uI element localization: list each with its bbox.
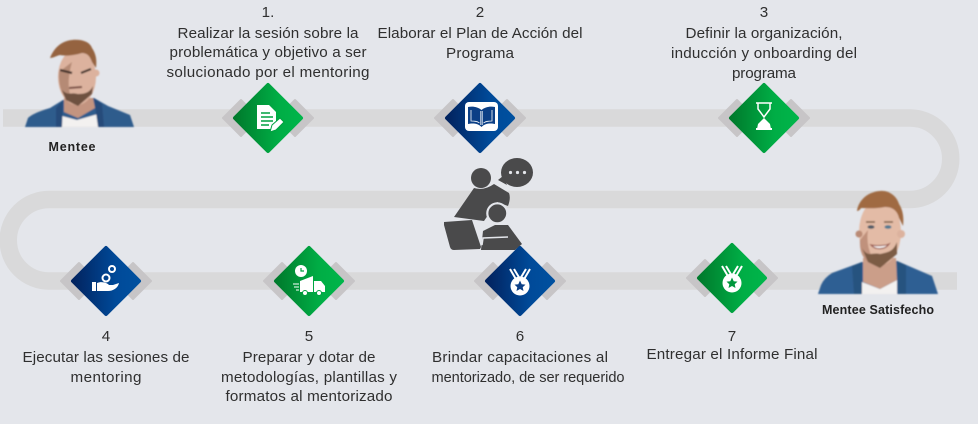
step 5 text: formatos al mentorizado xyxy=(226,388,392,405)
step 2 text: Programa xyxy=(446,45,515,62)
step 6 text: mentorizado, de ser requerido xyxy=(432,370,624,386)
label: Mentee Satisfecho: Mentee Satisfecho xyxy=(822,303,934,317)
step 6 diamond xyxy=(475,248,565,314)
portrait: Mentee xyxy=(25,40,134,127)
step 6 text: 6 xyxy=(516,328,524,345)
step 7 text: 7 xyxy=(728,328,736,345)
central mentoring icon xyxy=(444,158,533,250)
step 1 text: 1. xyxy=(262,4,274,21)
step 7 text: Entregar el Informe Final xyxy=(646,346,818,363)
icon: hand with coins xyxy=(92,266,119,291)
label: Mentee: Mentee xyxy=(48,140,96,154)
step 1 text: Realizar la sesión sobre la xyxy=(178,25,359,42)
step 6 text xyxy=(432,328,624,386)
step 5 text xyxy=(221,328,397,405)
icon: medal xyxy=(510,269,530,296)
step 3 text xyxy=(671,4,857,82)
icon: document and pencil xyxy=(257,105,284,132)
step 3 text: 3 xyxy=(760,4,768,21)
portrait: Mentee Satisfecho xyxy=(818,191,938,294)
step 2 text: 2 xyxy=(476,4,484,21)
icon: clock and delivery truck xyxy=(293,265,325,296)
step 1 text xyxy=(166,4,370,81)
step 4 text: Ejecutar las sesiones de xyxy=(22,349,190,366)
icon: open book xyxy=(465,102,498,131)
icon: medal xyxy=(722,266,742,292)
step 4 text: 4 xyxy=(102,328,110,345)
step 6 text: Brindar capacitaciones al xyxy=(432,349,608,366)
step 1 text: solucionado por el mentoring xyxy=(166,64,370,81)
step 4 text: mentoring xyxy=(70,369,142,386)
step 1 diamond xyxy=(223,85,313,151)
icon: hourglass xyxy=(756,103,772,129)
step 5 text: 5 xyxy=(305,328,313,345)
step 5 text: metodologías, plantillas y xyxy=(221,369,397,386)
step 4 text xyxy=(22,328,190,386)
step 2 diamond xyxy=(435,85,525,151)
step 7 text xyxy=(646,328,818,363)
step 3 text: Definir la organización, xyxy=(686,25,842,42)
serpentine path xyxy=(3,118,957,281)
step 4 diamond xyxy=(61,248,151,314)
step 3 text: programa xyxy=(732,65,797,82)
step 5 text: Preparar y dotar de xyxy=(242,349,376,366)
step 7 diamond xyxy=(687,245,777,311)
step 1 text: problemática y objetivo a ser xyxy=(170,44,366,61)
step 3 diamond xyxy=(719,85,809,151)
step 2 text xyxy=(378,4,582,62)
step 3 text: inducción y onboarding del xyxy=(671,45,857,62)
step 2 text: Elaborar el Plan de Acción del xyxy=(378,25,582,42)
step 5 diamond xyxy=(264,248,354,314)
